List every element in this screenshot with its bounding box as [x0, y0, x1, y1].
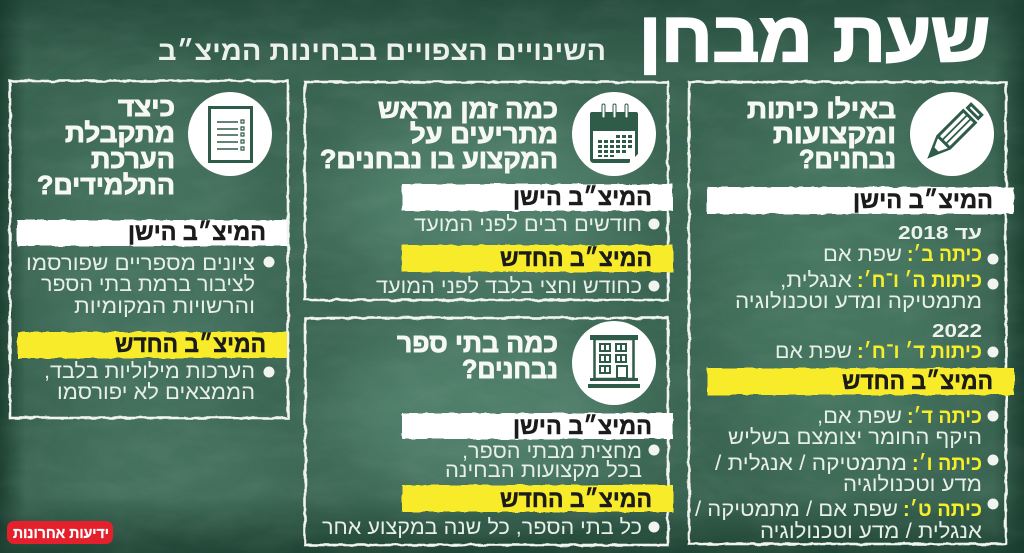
- new system bar: המיצ״ב החדש: [500, 245, 652, 272]
- new system list: שפת אם / מתמטיקה /: [695, 498, 898, 521]
- heading: המקצוע בו נבחנים?: [320, 144, 558, 174]
- panel: how long in advance: [305, 82, 673, 300]
- new system list: שפת אם,: [817, 405, 902, 428]
- old system bar: המיצ״ב הישן: [513, 184, 652, 211]
- old system list: [735, 223, 998, 363]
- new system bar: [402, 245, 673, 272]
- new system item: הערכות מילוליות בלבד,: [44, 360, 255, 383]
- old system item: לציבור ברמת בתי הספר: [41, 273, 255, 296]
- heading: נבחנים?: [799, 144, 896, 174]
- heading: התלמידים?: [37, 170, 175, 200]
- panel frame: [305, 318, 668, 545]
- heading: נבחנים?: [462, 354, 558, 384]
- old system bar: [17, 219, 287, 246]
- new system item: כחודש וחצי בלבד לפני המועד: [376, 275, 642, 298]
- new system item: [44, 360, 274, 404]
- heading: [397, 328, 558, 384]
- new system list: [695, 405, 998, 543]
- old system item: מחצית מבתי הספר,: [462, 440, 642, 463]
- old system item: בכל מקצועות הבחינה: [445, 459, 642, 482]
- new system bar: [402, 485, 673, 513]
- logo: Yedioth Ahronoth: ידיעות אחרונות: [13, 525, 109, 542]
- old system list: שפת אם: [823, 243, 902, 266]
- old system list: עד 2018: [898, 223, 982, 243]
- old system item: [26, 252, 274, 318]
- old system bar: [402, 413, 673, 440]
- old system list: 2022: [932, 321, 982, 341]
- new system list: היקף החומר יצומצם בשליש: [728, 426, 982, 449]
- new system bar: [707, 368, 1014, 395]
- old system item: [445, 440, 660, 482]
- icon: document checklist: [188, 92, 272, 176]
- old system item: והרשויות המקומיות: [74, 295, 255, 318]
- old system list: מתמטיקה ומדע וטכנולוגיה: [735, 290, 982, 313]
- old system item: ציונים מספריים שפורסמו: [26, 252, 255, 275]
- new system bar: המיצ״ב החדש: [115, 331, 266, 358]
- new system list: כיתה ו׳:: [912, 452, 982, 475]
- new system bar: המיצ״ב החדש: [500, 486, 652, 513]
- heading: כיצד: [118, 92, 175, 122]
- new system bar: [17, 331, 287, 358]
- old system bar: המיצ״ב הישן: [513, 413, 652, 440]
- panel: how students are assessed: [10, 81, 288, 418]
- new system list: אנגלית / מדע וטכנולוגיה: [760, 520, 982, 543]
- panel frame: [689, 82, 1006, 544]
- icon: pencil: [910, 92, 994, 176]
- heading: באילו כיתות: [747, 94, 896, 124]
- new system item: כל בתי הספר, כל שנה במקצוע אחר: [322, 516, 642, 539]
- panel frame: [305, 82, 668, 300]
- old system bar: [402, 184, 673, 211]
- old system bar: [707, 187, 1014, 214]
- icon: calendar: [572, 92, 656, 176]
- title: שעת מבחן: [639, 0, 990, 76]
- new system item: הממצאים לא יפורסמו: [57, 381, 255, 404]
- heading: ומקצועות: [773, 119, 896, 149]
- old system list: שפת אם: [775, 340, 852, 363]
- panel frame: [10, 81, 288, 418]
- subtitle: השינויים הצפויים בבחינות המיצ״ב: [158, 36, 606, 66]
- heading: מתקבלת: [65, 118, 175, 148]
- heading: הערכת: [91, 144, 175, 174]
- icon: school building: [572, 321, 656, 405]
- new system bar: המיצ״ב החדש: [842, 368, 993, 395]
- heading: [747, 94, 896, 174]
- panel: which grades and subjects: [689, 82, 1014, 544]
- logo: Yedioth Ahronoth: [7, 521, 113, 544]
- heading: כמה בתי ספר: [397, 328, 558, 358]
- panel: how many schools: [305, 318, 673, 545]
- old system list: כיתות ד׳ ו־ח׳:: [857, 340, 982, 363]
- heading: כמה זמן מראש: [378, 94, 558, 124]
- heading: [37, 92, 175, 200]
- new system list: מתמטיקה / אנגלית /: [715, 452, 907, 475]
- old system list: כיתה ב׳:: [907, 243, 982, 266]
- old system bar: המיצ״ב הישן: [128, 219, 266, 246]
- heading: מתריעים על: [410, 119, 558, 149]
- old system item: חודשים רבים לפני המועד: [414, 213, 642, 236]
- new system list: מדע וטכנולוגיה: [843, 473, 982, 496]
- old system list: אנגלית,: [780, 269, 852, 292]
- new system list: כיתה ט׳:: [903, 498, 982, 521]
- new system list: כיתה ד׳:: [907, 405, 982, 428]
- old system list: כיתות ה׳ ו־ח׳:: [857, 269, 982, 292]
- old system bar: המיצ״ב הישן: [853, 187, 993, 214]
- heading: [320, 94, 558, 174]
